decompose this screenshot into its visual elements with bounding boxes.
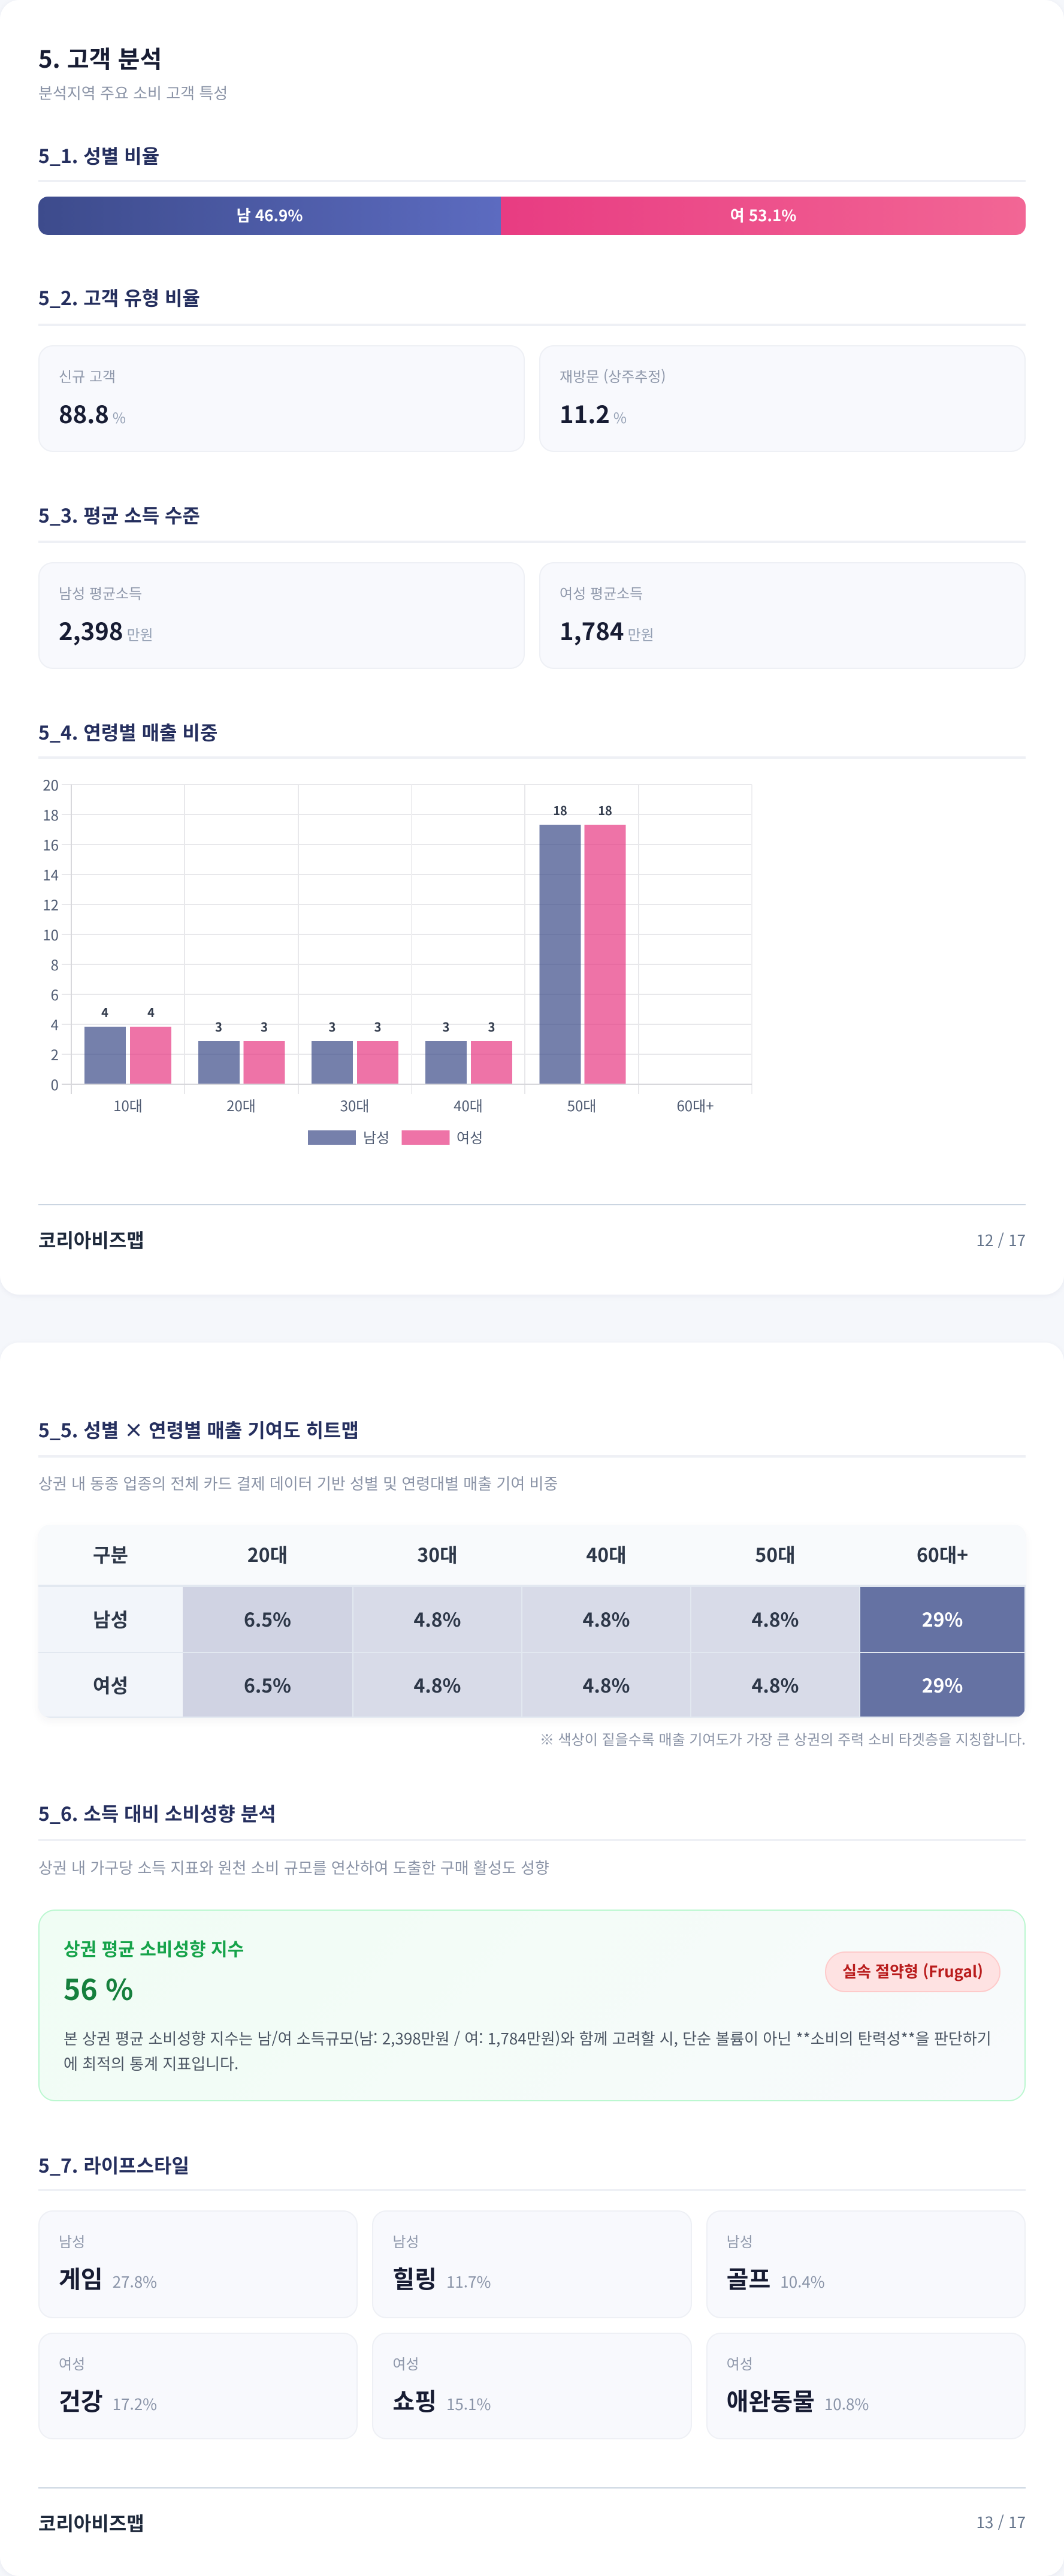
row: female: 29% [922,1671,963,1699]
y axis labels: 12 [43,894,59,915]
bar value labels: 3 [374,1018,381,1035]
callout paragraph [64,2027,992,2074]
panel: page 13 customer analysis continued [0,1343,1064,2576]
row: male: 남성 [93,1605,128,1633]
bar value labels: 4 [147,1003,155,1021]
x axis labels: 20대 [226,1094,256,1115]
label: 남성 [392,2230,419,2251]
y axis labels: 8 [51,954,59,975]
callout value: 56 % [64,1966,133,2008]
header row: 30대 [417,1540,458,1568]
lifestyle card: health [38,2333,358,2439]
description: heatmap: 상권 내 동종 업종의 전체 카드 결제 데이터 기반 성별 및 연령대별 매출 기여 비중 [38,1472,558,1494]
label: 여성 [727,2352,753,2373]
bar value labels: 3 [443,1018,449,1035]
value: 골프 10.4% [727,2260,825,2295]
label: 신규 고객 [59,365,116,386]
heatmap note: ※ 색상이 짙을수록 매출 기여도가 가장 큰 상권의 주력 소비 타겟층을 지칭합니다. [540,1728,1026,1749]
bar value labels: 4 [101,1003,108,1021]
heading: 5_4 sales share by age [38,720,1026,759]
heading: 5_7 lifestyle: 5_7. 라이프스타일 [38,2151,189,2179]
heading: 5_2 customer type ratio [38,285,1026,326]
bar value labels: 3 [329,1018,335,1035]
row: female: 4.8% [582,1671,630,1699]
heading: 5_7 lifestyle [38,2153,1026,2191]
heading: 5_3 average income [38,503,1026,543]
heading: 5_5 heatmap: 5_5. 성별 × 연령별 매출 기여도 히트맵 [38,1416,359,1443]
value: 88.8% [59,396,126,430]
row: male: 4.8% [751,1605,799,1633]
heading: 5_3 average income: 5_3. 평균 소득 수준 [38,501,200,529]
y axis labels: 20 [43,774,59,795]
lifestyle card: pets [706,2333,1026,2439]
row: male: 4.8% [413,1605,461,1633]
row: male: 29% [922,1605,963,1633]
row: male: 4.8% [582,1605,630,1633]
panel: page 12 customer analysis [0,0,1064,1295]
bar chart: sales share by age and gender [43,774,752,1147]
x axis labels: 50대 [567,1094,596,1115]
description: propensity: 상권 내 가구당 소득 지표와 원천 소비 규모를 연산하여 도출한 구매 활성도 성향 [38,1856,549,1878]
bar value labels: 18 [553,801,567,819]
lifestyle card: healing [372,2210,692,2318]
header row: 60대+ [917,1540,968,1568]
heading: 5_2 customer type ratio: 5_2. 고객 유형 비율 [38,283,200,311]
bar value labels: 3 [488,1018,495,1035]
label: 남성 [727,2230,753,2251]
label: 여성 [59,2352,85,2373]
heading: 5_6 propensity to consume [38,1801,1026,1841]
value: 11.2% [560,396,627,430]
legend [308,1126,483,1147]
y axis labels: 2 [51,1043,59,1064]
bar value labels: 3 [215,1018,222,1035]
x axis labels: 60대+ [676,1094,714,1115]
row: female: 4.8% [413,1671,461,1699]
stacked bar: gender ratio [38,197,1026,235]
brand: 코리아비즈맵 [38,2509,144,2536]
row: male: 6.5% [244,1605,291,1633]
heading: 5_1 gender ratio [38,143,1026,182]
lifestyle card: game [38,2210,358,2318]
stat card: female income [539,562,1026,669]
legend: 남성 [363,1126,389,1147]
subtitle: 분석지역 주요 소비 고객 특성 [38,82,228,104]
label: 여성 평균소득 [560,582,643,603]
row: female [38,1653,1024,1717]
badge: frugal [825,1951,1000,1992]
callout paragraph: 본 상권 평균 소비성향 지수는 남/여 소득규모(남: 2,398만원 / 여: 1,784만원)와 함께 고려할 시, 단순 볼륨이 아닌 **소비의 탄력성**을 판단하기 [64,2027,992,2049]
female bars [130,825,625,1084]
value: 애완동물 10.8% [727,2382,869,2417]
male bars [84,825,581,1084]
bar value labels [101,801,612,1035]
y axis labels: 6 [51,984,59,1005]
label: 남성 [59,2230,85,2251]
row: female: 6.5% [244,1671,291,1699]
row: male [38,1587,1024,1652]
bar value labels: 18 [598,801,612,819]
label: 재방문 (상주추정) [560,365,666,386]
y axis labels: 16 [43,834,59,855]
header row: 40대 [586,1540,627,1568]
heading: 5_4 sales share by age: 5_4. 연령별 매출 비중 [38,718,217,746]
x axis labels [113,1094,714,1115]
callout paragraph: 에 최적의 통계 지표입니다. [64,2052,238,2074]
page number: 13 / 17 [977,2511,1026,2533]
callout: propensity index [38,1910,1026,2101]
value: 건강 17.2% [59,2382,157,2417]
bar segment: male [38,197,501,235]
x axis labels: 40대 [454,1094,483,1115]
brand: 코리아비즈맵 [38,1226,144,1253]
bar segment: female [501,197,1026,235]
header row [38,1525,1026,1585]
label: 남성 평균소득 [59,582,142,603]
value: 1,784만원 [560,613,654,647]
heatmap table [38,1525,1026,1718]
y axis labels: 0 [51,1073,59,1094]
x axis labels: 30대 [340,1094,369,1115]
header row: 구분 [93,1540,128,1568]
header row: 50대 [755,1540,796,1568]
value: 힐링 11.7% [392,2260,491,2295]
y axis labels: 4 [51,1013,59,1034]
badge: frugal: 실속 절약형 (Frugal) [842,1960,983,1982]
callout label: 상권 평균 소비성향 지수 [64,1935,244,1961]
page number: 12 / 17 [977,1229,1026,1251]
footer: page 12 [38,1204,1026,1253]
value: 쇼핑 15.1% [392,2382,491,2417]
legend: 여성 [457,1126,483,1147]
heading: 5_5 heatmap [38,1417,1026,1458]
y axis labels [43,774,59,1094]
x axis labels: 10대 [113,1094,143,1115]
lifestyle card: golf [706,2210,1026,2318]
bar segment: female: 여 53.1% [730,204,796,226]
stat card: male income [38,562,525,669]
heading: 5_1 gender ratio: 5_1. 성별 비율 [38,141,159,169]
stat card: returning visitors [539,345,1026,452]
footer: page 13 [38,2487,1026,2536]
label: 여성 [392,2352,419,2373]
heading: 5_6 propensity to consume: 5_6. 소득 대비 소비성향 분석 [38,1799,276,1827]
header row: 20대 [247,1540,288,1568]
bar segment: male: 남 46.9% [237,204,303,226]
row: female: 4.8% [751,1671,799,1699]
y axis labels: 14 [43,864,59,885]
y axis labels: 18 [43,804,59,825]
title: 5. 고객 분석 [38,40,162,75]
value: 게임 27.8% [59,2260,157,2295]
bar value labels: 3 [261,1018,268,1035]
row: female: 여성 [93,1671,128,1699]
stat card: new customers [38,345,525,452]
y axis labels: 10 [43,924,59,945]
value: 2,398만원 [59,613,153,647]
lifestyle card: shopping [372,2333,692,2439]
